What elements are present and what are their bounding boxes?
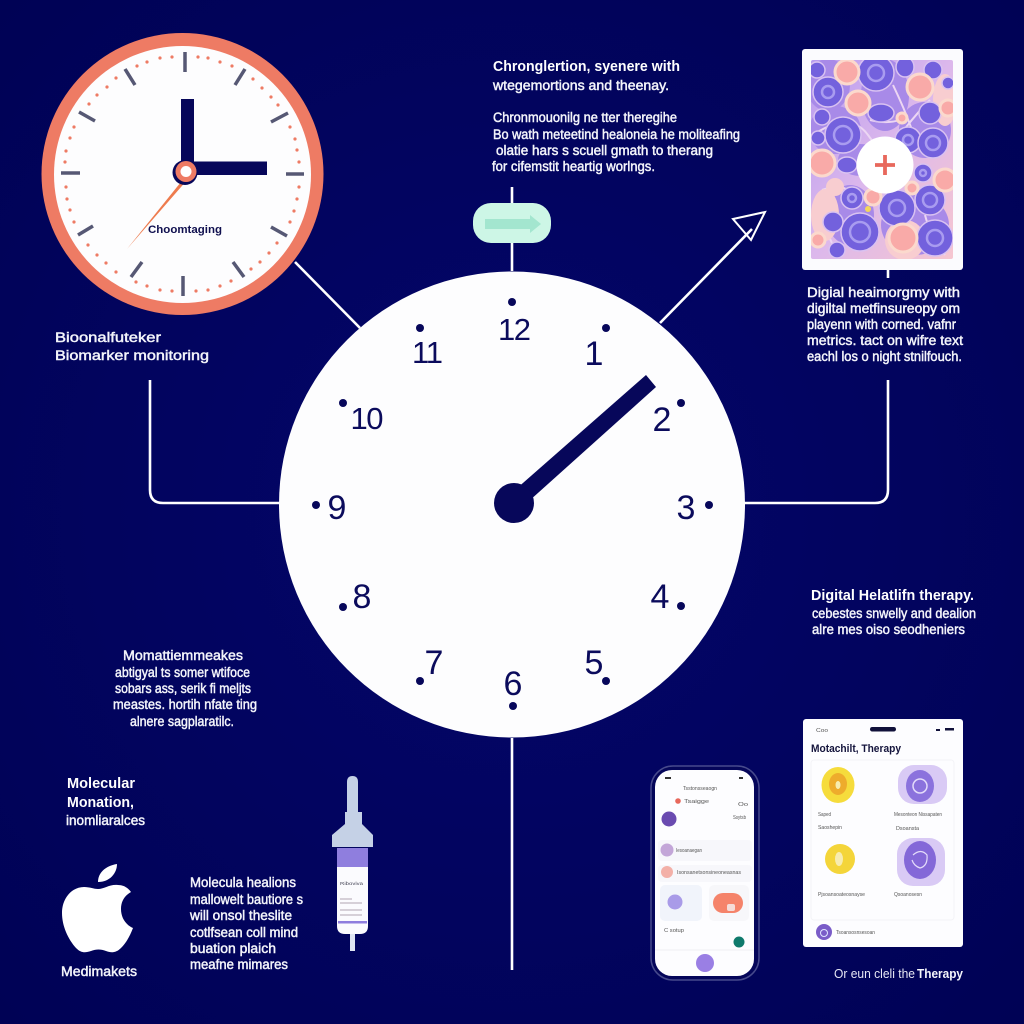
yellow spot bbox=[865, 206, 871, 212]
phone row: header bbox=[662, 798, 748, 826]
apple caption: Medimakets bbox=[61, 964, 137, 979]
panel: chronotherapy clock bbox=[42, 33, 324, 315]
molecular heading: inomliaralces bbox=[66, 813, 145, 828]
main clock face bbox=[279, 272, 745, 738]
icon: syringe vial: Riboviva bbox=[340, 881, 364, 886]
molecular text block centred: abtigyal ts somer wtifoce bbox=[115, 665, 250, 680]
status bar bbox=[816, 727, 954, 734]
digital health therapy text: Digital Helatlifn therapy. bbox=[811, 588, 974, 604]
card footer bbox=[816, 924, 875, 940]
icon captions: Saoshepin bbox=[818, 825, 842, 831]
card footer: Tsoansosnsesoan bbox=[836, 930, 875, 936]
top centre text block: Bo wath meteetind healoneia he moliteafing bbox=[493, 127, 740, 142]
biomarker label bbox=[55, 330, 209, 363]
panel: therapy app card bbox=[803, 719, 963, 947]
icon: apple bbox=[62, 864, 133, 952]
top centre text block: for cifemstit heartig worlngs. bbox=[492, 159, 655, 174]
digital text block: eachl los o night stnilfouch. bbox=[807, 349, 962, 364]
molecular healing text block: buation plaich bbox=[190, 941, 276, 956]
icon captions: Qsoanosesn bbox=[894, 892, 922, 898]
molecular text block centred: sobars ass, serik fi meljts bbox=[115, 681, 251, 696]
biomarker label: Bioonalfuteker bbox=[55, 330, 162, 345]
molecular healing text block: Molecula healions bbox=[190, 875, 296, 890]
clock hand bbox=[494, 375, 656, 523]
icon: syringe vial bbox=[332, 776, 373, 951]
phone tiles bbox=[660, 885, 749, 921]
top centre text block: wtegemortions and theenay. bbox=[492, 78, 669, 93]
phone list cards: Isonsanetsonsineoneasnas bbox=[677, 870, 742, 876]
clock hour ticks bbox=[61, 52, 304, 296]
clock label: Choomtaging bbox=[148, 224, 222, 236]
digital health therapy text: cebestes snwelly and dealion bbox=[812, 606, 976, 621]
status bar: Coo bbox=[816, 728, 828, 734]
hour numbers: 6 bbox=[504, 665, 522, 703]
icon captions bbox=[818, 812, 942, 898]
icon captions: Saped bbox=[818, 812, 831, 818]
purple cell nuclei bbox=[822, 65, 943, 246]
purple cells bbox=[809, 55, 954, 258]
icon captions: Mesonteon Nissapaten bbox=[894, 812, 942, 818]
digital health therapy text bbox=[811, 588, 976, 637]
digital text block: metrics. tact on wifre text bbox=[807, 333, 963, 348]
phone row: header: Tsaigge bbox=[684, 799, 709, 805]
purple icons bbox=[897, 765, 947, 886]
molecular text block centred: meastes. hortih nfate ting bbox=[113, 697, 257, 712]
molecular heading: Molecular bbox=[67, 776, 135, 792]
panel: tablet with tissue image bbox=[802, 49, 963, 270]
hour numbers: 9 bbox=[328, 489, 346, 527]
tissue illustration bbox=[806, 55, 957, 260]
plus badge bbox=[856, 136, 914, 194]
molecular heading bbox=[66, 776, 145, 828]
molecular healing text block: will onsol theslite bbox=[189, 908, 292, 923]
top centre text block: Chronglertion, syenere with bbox=[493, 59, 680, 75]
pink cells bbox=[809, 60, 956, 252]
hour numbers: 11 bbox=[412, 335, 443, 370]
digital text block bbox=[807, 285, 963, 364]
pink tissue blobs bbox=[811, 74, 957, 260]
phone title: Tsstonsseaogn bbox=[683, 786, 717, 792]
digital text block: playenn with corned. vafnr bbox=[807, 317, 956, 332]
arrow: diagonal to tablet bbox=[660, 212, 765, 323]
molecular text block centred: Momattiemmeakes bbox=[123, 648, 243, 663]
top centre text block bbox=[492, 59, 740, 174]
molecular healing text block: cotlfsean coll mind bbox=[190, 925, 298, 940]
card title: Motachilt, Therapy bbox=[811, 743, 902, 755]
phone row: header: Oo bbox=[738, 802, 748, 808]
phone footer bbox=[655, 928, 754, 972]
molecular healing text block: mallowelt bautiore s bbox=[190, 892, 303, 907]
icon captions: Dsoansta bbox=[896, 826, 919, 832]
molecular text block centred: alnere sagplaratilc. bbox=[130, 714, 234, 729]
clock hands bbox=[127, 99, 267, 249]
hour numbers: 3 bbox=[677, 489, 695, 527]
arrow pill bbox=[473, 203, 551, 243]
hour numbers: 1 bbox=[585, 335, 603, 373]
phone list cards: Iesoanaegan bbox=[676, 848, 702, 854]
therapy caption: Or eun cleli the bbox=[834, 966, 915, 981]
hour numbers: 8 bbox=[353, 578, 371, 616]
molecular healing text block: meafne mimares bbox=[190, 957, 288, 972]
lavender filler shapes bbox=[806, 59, 951, 255]
hour numbers: 2 bbox=[653, 401, 671, 439]
hour numbers: 4 bbox=[651, 578, 669, 616]
hour dots bbox=[312, 298, 713, 710]
hour numbers: 10 bbox=[350, 401, 384, 436]
pale membranes bbox=[811, 85, 945, 255]
top centre text block: Chronmouonilg ne tter theregihe bbox=[493, 110, 677, 125]
connector lines bbox=[150, 187, 888, 970]
biomarker label: Biomarker monitoring bbox=[55, 348, 209, 363]
phone footer: C sotup bbox=[664, 928, 684, 934]
digital health therapy text: alre mes oiso seodheniers bbox=[812, 622, 965, 637]
molecular text block centred bbox=[113, 648, 257, 729]
therapy caption bbox=[834, 966, 964, 981]
molecular healing text block bbox=[189, 875, 303, 972]
top centre text block: olatie hars s scuell gmath to therang bbox=[496, 143, 713, 158]
hour numbers: 12 bbox=[498, 312, 531, 347]
clock minute dots bbox=[63, 55, 301, 293]
digital text block: digiltal metfinsureopy om bbox=[807, 301, 960, 316]
therapy caption: Therapy bbox=[917, 966, 964, 981]
panel: phone app bbox=[651, 766, 759, 980]
molecular heading: Monation, bbox=[67, 795, 134, 811]
phone list cards bbox=[658, 840, 752, 882]
phone row: header: Ssytsb bbox=[733, 815, 746, 821]
hour numbers: 5 bbox=[585, 644, 603, 682]
hour numbers bbox=[328, 312, 695, 703]
yellow icons bbox=[822, 767, 855, 874]
hour numbers: 7 bbox=[425, 644, 443, 682]
icon captions: Pjsoansoateosnayse bbox=[818, 892, 865, 898]
digital text block: Digial heaimorgmy with bbox=[807, 285, 960, 300]
